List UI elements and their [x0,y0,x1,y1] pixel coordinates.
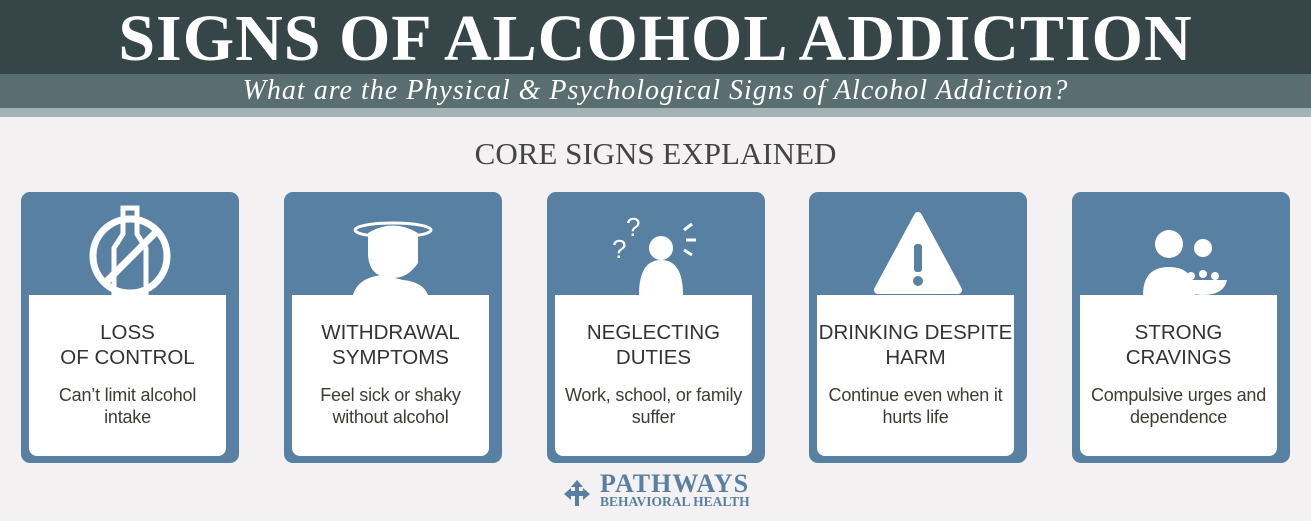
panel: withdrawal: SYMPTOMS [332,346,449,369]
panel: loss of control: LOSS [100,321,155,344]
icon: confused person: ? [626,212,640,242]
logo: BEHAVIORAL HEALTH [600,494,750,509]
panel: neglecting duties: Work, school, or family [565,385,742,405]
panel: withdrawal: Feel sick or shaky [320,385,461,405]
title: SIGNS OF ALCOHOL ADDICTION [118,2,1193,75]
panel: strong cravings: dependence [1130,407,1227,427]
panel: neglecting duties: suffer [632,407,675,427]
icon: dizzy person [353,222,432,295]
panel: loss of control [21,192,239,463]
panel: withdrawal: WITHDRAWAL [321,321,460,344]
subtitle [0,74,1311,108]
panel: loss of control: intake [104,407,151,427]
logo [564,469,750,509]
panel: loss of control: Can’t limit alcohol [59,385,196,405]
icon: confused person [612,212,696,295]
icon: warning [874,212,962,294]
icon: confused person: ? [612,234,626,264]
panel: drinking despite harm: hurts life [882,407,949,427]
panel: neglecting duties: NEGLECTING [587,321,720,344]
panel: strong cravings: CRAVINGS [1126,346,1231,369]
panel: drinking despite harm: Continue even when it [829,385,1002,405]
icon: person with bowl [1143,230,1227,295]
panel: loss of control: OF CONTROL [60,346,195,369]
icon: no bottle [90,206,170,295]
section heading: CORE SIGNS EXPLAINED [475,136,836,171]
panel: withdrawal: without alcohol [332,407,449,427]
panel: withdrawal [284,192,502,463]
panel: strong cravings [1072,192,1290,463]
panel: strong cravings: STRONG [1135,321,1222,344]
panel: drinking despite harm [809,192,1027,463]
panel: strong cravings: Compulsive urges and [1091,385,1266,405]
panel: neglecting duties [547,192,765,463]
panel: neglecting duties: DUTIES [616,346,691,369]
subtitle: What are the Physical & Psychological Signs of Alcohol Addiction? [243,75,1068,106]
logo: PATHWAYS [600,469,749,498]
panel: drinking despite harm: HARM [885,346,946,369]
panel: drinking despite harm: DRINKING DESPITE [819,321,1012,344]
